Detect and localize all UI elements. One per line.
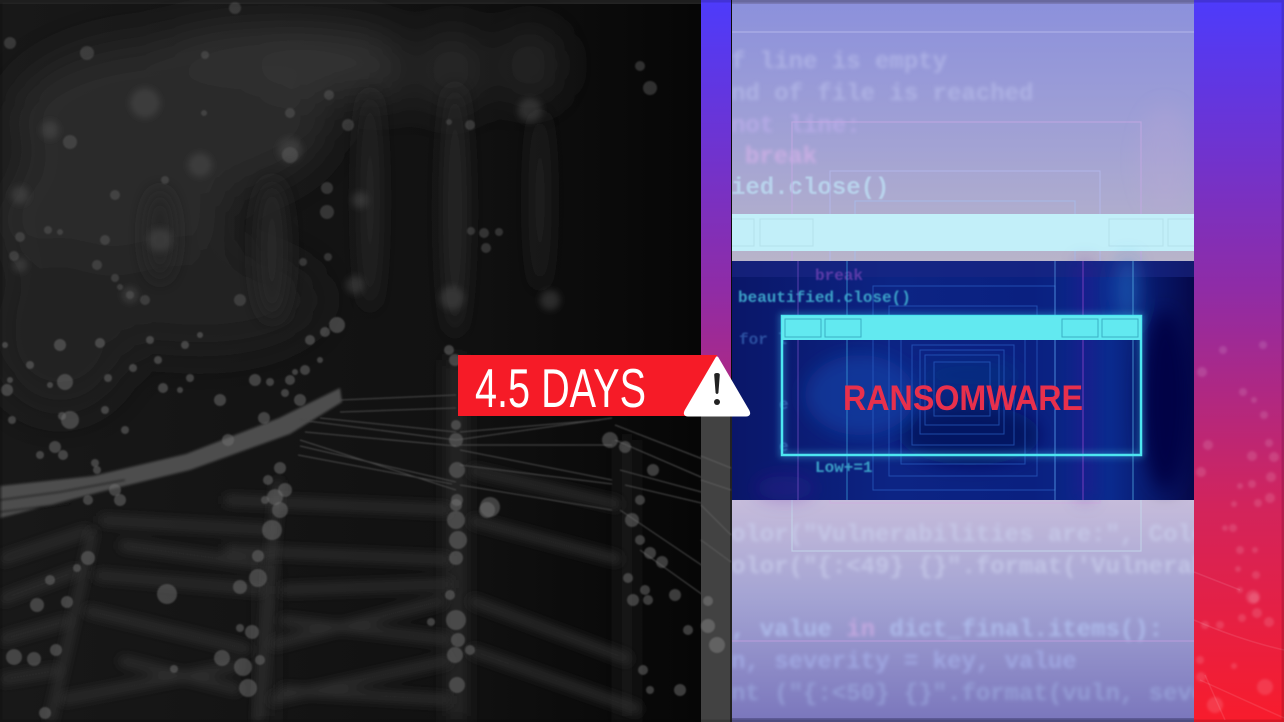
code lines inside image: e [779,396,789,414]
blurred code lines, bottom: , value in dict_final.items(): [731,617,1163,644]
window title bar [782,316,1141,340]
nested frames and vertical lines [873,286,1055,490]
right strip particles [1196,341,1279,713]
code lines inside image [738,267,911,477]
blurred streaks in the lower half [0,470,640,710]
window outline glow [782,316,1141,455]
vertical light columns [256,108,632,720]
thick diagonal band [0,388,342,518]
panel: ransomware code window [727,0,1206,722]
code lines inside image: Low+=1 [815,459,873,477]
soft blurred bokeh [11,88,560,310]
top haze [0,24,560,410]
bottom window frames [732,500,1194,642]
particle dots [1,317,693,719]
network column strands [50,480,278,722]
blurred code lines, bottom: olor("{:<49} {}".format('Vulnerab [731,554,1206,581]
word: RANSOMWARE: RANSOMWARE [843,379,1083,418]
icon: warning triangle [685,358,749,415]
label text: 4.5 DAYS [475,357,646,419]
code lines inside image: for l [739,331,787,349]
light title bar [731,214,1194,251]
blurred code lines, bottom: nt ("{:<50} {}".format(vuln, seve [731,681,1206,708]
upper translucent panel [732,0,1194,261]
lower translucent panel [732,500,1194,722]
blurred code lines, top: nd of file is reached [731,81,1033,108]
blurred code lines, top [731,49,1033,171]
code lines inside image: beautified.close() [738,289,911,307]
faint upper particles [4,2,657,306]
image glows [755,256,1189,500]
blurred code lines, top: f line is empty [731,49,947,76]
panel: dark particle network background [0,0,731,722]
thin network lines [298,394,701,595]
blurred code lines, bottom: olor("Vulnerabilities are:", Colo [731,522,1206,549]
top window frames [732,32,1194,261]
blurred code lines, bottom [731,522,1206,708]
blurred code lines, top: not line: [731,113,861,140]
red label box [458,355,717,416]
callout: 4.5 days [458,355,749,419]
grey overlay strip below the callout [701,416,731,722]
code lines inside image: break [815,267,863,285]
gradient strip: middle [701,0,732,722]
code lines inside image: e [779,438,789,456]
gradient strip: right [1194,0,1284,722]
image band [731,256,1194,500]
blurred code lines, top: break [745,144,817,171]
blurred code lines, bottom: n, severity = key, value [731,649,1077,676]
sharper code line, top: ied.close() [731,175,889,202]
